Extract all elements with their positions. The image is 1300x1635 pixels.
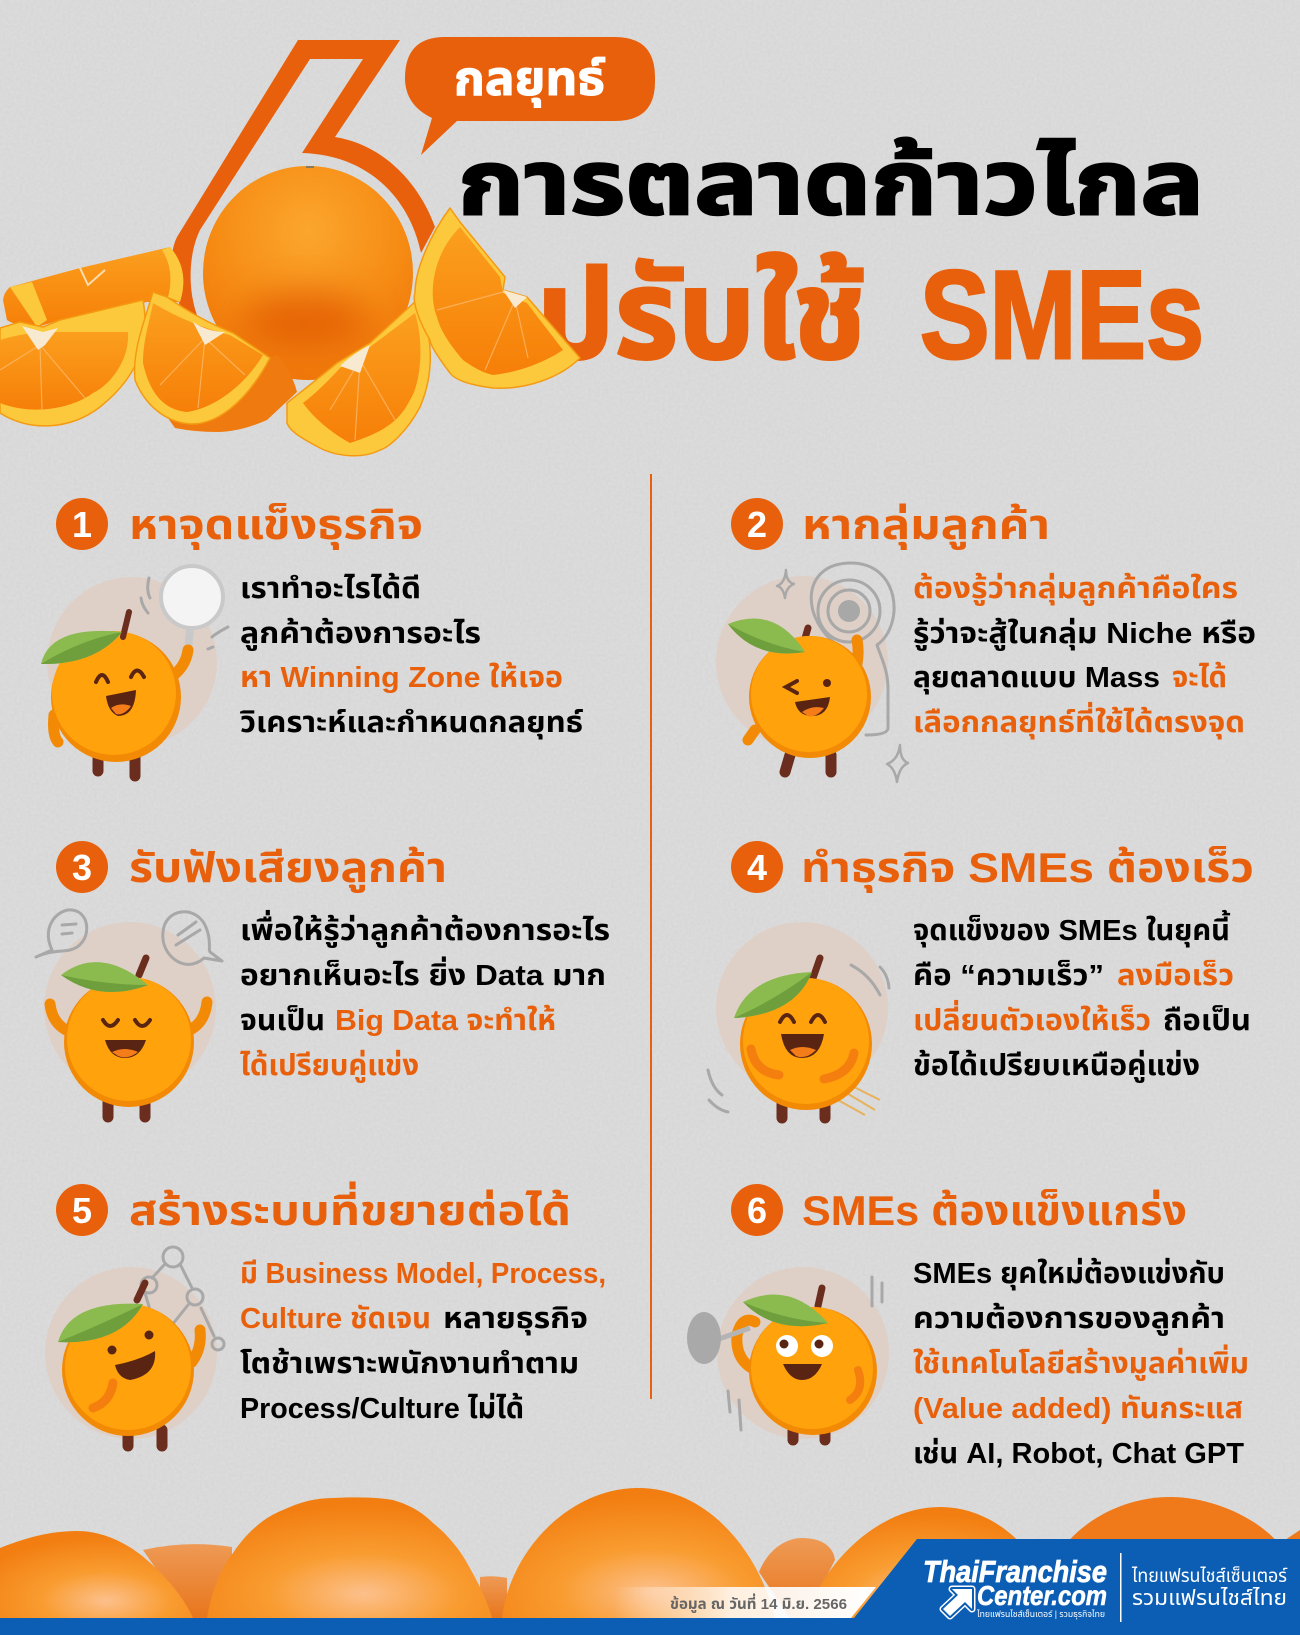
footer divider and slogan: ไทยแฟรนไชส์เซ็นเตอร์ [1131,1566,1288,1587]
title line 2: SMEs [920,246,1204,385]
whole orange [203,166,413,380]
text 2: ต้องรู้ว่ากลุ่มลูกค้าคือใคร [913,573,1238,606]
bubble text: กลยุทธ์ [454,53,606,108]
heading 6: SMEs ต้องแข็งแกร่ง [802,1187,1187,1234]
text 1: วิเคราะห์และกำหนดกลยุทธ์ [240,707,584,739]
heading 4: ทำธุรกิจ SMEs ต้องเร็ว [801,844,1254,893]
badge 6: 6 [747,1190,767,1231]
character 1: orange with magnifier [41,566,228,776]
badge 4 [731,841,783,893]
footer: source note: ข้อมูล ณ วันที่ 14 มิ.ย. 2566 [670,1593,847,1614]
footer: logo: ThaiFranchise [923,1554,1107,1589]
badge 5: 5 [72,1190,92,1231]
text 6: เช่น AI, Robot, Chat GPT [913,1438,1244,1470]
badge 3 [56,841,108,893]
panel: section 3 [36,841,610,1117]
panel: section 6 [687,1184,1249,1470]
text 1 [240,573,584,739]
text 5: โตช้าเพราะพนักงานทำตาม [240,1348,579,1380]
text 4: คือ “ความเร็ว” [913,960,1104,992]
title line 2 [537,246,1204,385]
text 4 [913,909,1251,1083]
text 2: เลือกกลยุทธ์ที่ใช้ได้ตรงจุด [913,701,1245,739]
panel: section 4 [708,841,1254,1118]
character 2: orange with target [716,563,908,782]
text 4: ลงมือเร็ว [1117,960,1234,992]
text 3: อยากเห็นอะไร ยิ่ง Data มาก [240,956,606,992]
text 6: ความต้องการของลูกค้า [913,1303,1225,1336]
slice front left [0,300,145,426]
slice right [414,208,580,388]
text 6: SMEs ยุคใหม่ต้องแข่งกับ [913,1258,1225,1290]
footer: logo [923,1554,1107,1619]
footer: blue brand bar [0,1539,1300,1635]
text 2 [913,573,1256,739]
text 4: จุดแข็งของ SMEs ในยุคนี้ [913,909,1231,947]
badge 2 [731,498,783,550]
text 5: หลายธุรกิจ [443,1303,588,1335]
badge 1 [56,498,108,550]
text 3: จนเป็น [240,1005,325,1037]
panel: section 5 [45,1181,606,1446]
title line 1: การตลาดก้าวไกล [458,134,1204,234]
text 5: Process/Culture ไม่ได้ [240,1393,524,1425]
heading 1: หาจุดแข็งธุรกิจ [129,501,423,550]
text 6: (Value added) ทันกระแส [913,1393,1243,1425]
badge 1: 1 [72,504,92,545]
bottom oranges [0,1488,1300,1618]
character 4: fast orange [708,922,889,1118]
panel: section 1 [41,498,584,776]
speech bubble [405,37,655,155]
text 2: จะได้ [1172,662,1227,694]
footer: source note [614,1587,876,1618]
center divider [650,474,652,1399]
text 6: ใช้เทคโนโลยีสร้างมูลค่าเพิ่ม [913,1344,1249,1381]
character 5: orange with network [45,1247,224,1446]
slice center left [135,292,297,432]
text 5 [240,1258,606,1425]
text 6 [913,1258,1249,1470]
footer divider and slogan [1120,1553,1288,1622]
text 4: ถือเป็น [1163,1005,1251,1037]
heading 3: รับฟังเสียงลูกค้า [129,844,447,893]
badge 3: 3 [72,847,92,888]
footer divider and slogan: รวมแฟรนไชส์ไทย [1132,1587,1287,1610]
footer: logo: ไทยแฟรนไชส์เซ็นเตอร์ | รวมธุรกิจไทย [976,1609,1105,1619]
badge 5 [56,1184,108,1236]
heading 2: หากลุ่มลูกค้า [802,501,1050,550]
character 6: orange with dumbbell [687,1267,889,1440]
badge 4: 4 [747,847,767,888]
text 1: หา Winning Zone ให้เจอ [240,662,563,694]
big number 6 outline [171,40,435,315]
header oranges [0,166,580,456]
title line 2: ปรับใช้ [537,246,866,385]
heading 5: สร้างระบบที่ขยายต่อได้ [129,1181,571,1234]
footer: logo: Center.com [977,1580,1107,1611]
text 2: ลุยตลาดแบบ Mass [913,662,1160,694]
slice back left [3,247,183,327]
text 4: ข้อได้เปรียบเหนือคู่แข่ง [913,1050,1200,1083]
badge 6 [731,1184,783,1236]
icon: logo arrow [943,1589,972,1616]
text 4: เปลี่ยนตัวเองให้เร็ว [913,999,1151,1037]
panel: section 2 [716,498,1256,782]
text 1: เราทำอะไรได้ดี [240,573,421,605]
text 5: มี Business Model, Process, [240,1258,606,1290]
character 3: orange with speech bubbles [36,910,222,1117]
slice center right [287,300,430,456]
badge 2: 2 [747,504,767,545]
text 5: Culture ชัดเจน [240,1303,431,1335]
text 3: เพื่อให้รู้ว่าลูกค้าต้องการอะไร [240,909,610,948]
text 2: รู้ว่าจะสู้ในกลุ่ม Niche หรือ [913,618,1256,651]
text 3: Big Data จะทำให้ [335,1005,556,1037]
text 3 [240,909,610,1083]
text 1: ลูกค้าต้องการอะไร [240,618,481,651]
text 3: ได้เปรียบคู่แข่ง [240,1050,419,1083]
